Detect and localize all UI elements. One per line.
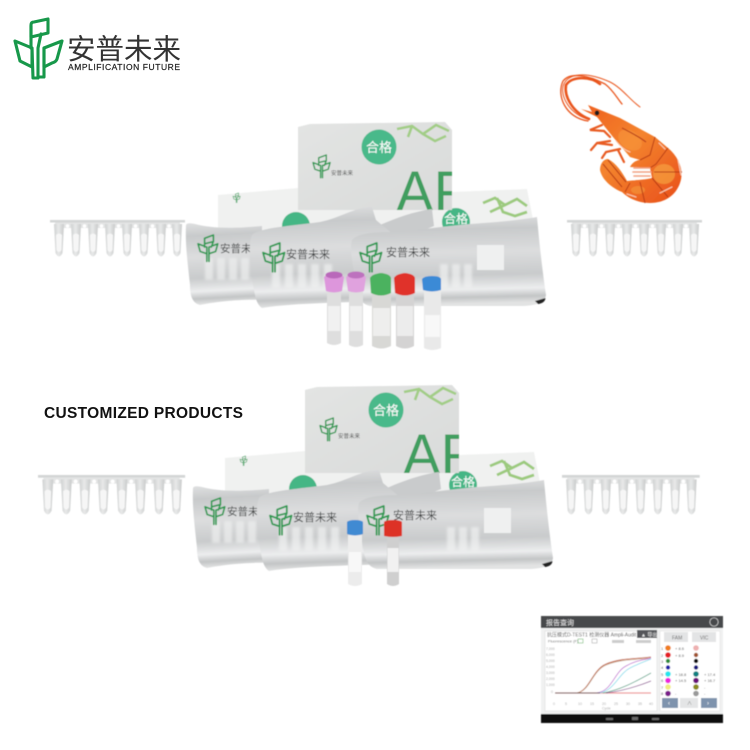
legend panel: -: [675, 691, 677, 696]
legend panel: -: [704, 691, 706, 696]
chart panel: 4,000: [546, 665, 555, 669]
chart panel: ▲ 导出: [641, 632, 657, 638]
chart panel: 5: [565, 702, 567, 706]
vial: red: [394, 273, 415, 348]
tube strip: top right: [567, 220, 702, 256]
pouch brand: right: 安普未来: [393, 508, 437, 522]
legend panel: + 18.8: [675, 672, 687, 677]
legend panel: ›: [707, 701, 709, 707]
product kit: top: [186, 122, 546, 350]
chart panel: 5,000: [546, 659, 555, 663]
logo Chinese name: 安普未来: [67, 27, 181, 68]
product kit: bottom: [193, 385, 553, 586]
carton brand name: 安普未来: [338, 432, 361, 440]
chart panel: 15: [590, 702, 594, 706]
logo mark: [15, 19, 62, 78]
chart panel: 30: [626, 702, 630, 706]
legend panel: 6: [661, 678, 664, 683]
chart panel: 35: [638, 702, 642, 706]
logo: [15, 19, 181, 78]
icon: shrimp: [561, 75, 682, 203]
screen header: [541, 616, 723, 628]
chart panel: Fluorescence (F): [548, 638, 579, 644]
legend panel: ‹: [668, 701, 670, 707]
pouch brand: middle: 安普未来: [286, 247, 330, 261]
chart panel: Cycle: [602, 706, 611, 710]
vial: purple one: [324, 272, 344, 345]
vial: blue: [422, 276, 441, 350]
legend panel: 3: [661, 659, 664, 664]
pouch brand: middle: 安普未来: [293, 510, 337, 524]
vial: red: [384, 520, 402, 586]
results screen: [541, 616, 723, 723]
logo English name: AMPLIFICATION FUTURE: [68, 62, 180, 72]
legend panel: + 8.9: [675, 653, 685, 658]
badge on back sachet: 合格: [451, 474, 475, 489]
chart panel: 25: [614, 702, 618, 706]
vial: blue: [347, 520, 363, 586]
chart panel: 20: [602, 702, 606, 706]
screen header: 报告查询: [546, 618, 574, 627]
badge on back sachet: 合格: [444, 211, 468, 226]
legend panel: 4: [661, 665, 664, 670]
tube strip: top left: [50, 220, 185, 256]
carton brand letters: AF: [396, 160, 468, 225]
screen bottom bar: [541, 714, 723, 723]
legend panel: -: [704, 685, 706, 690]
legend panel: ∧: [687, 701, 692, 707]
heading: CUSTOMIZED PRODUCTS: [44, 405, 243, 422]
chart panel: 0: [551, 690, 553, 694]
chart panel: 1,000: [546, 683, 555, 687]
pouch brand: left: 安普未来: [227, 505, 269, 518]
legend panel: 7: [661, 685, 664, 690]
chart panel: 10: [578, 702, 582, 706]
chart panel: 抗压模式D-TEST1 检测仪器 Ampli-Audit: [547, 632, 637, 638]
chart panel: 3,000: [546, 671, 555, 675]
legend panel: 8: [661, 691, 664, 696]
legend panel: + 8.6: [675, 646, 685, 651]
legend panel: [660, 631, 720, 711]
legend panel: 1: [661, 646, 664, 651]
carton brand letters: AF: [403, 423, 475, 488]
chart panel: 6,000: [546, 653, 555, 657]
vial: purple two: [346, 272, 366, 347]
legend panel: 2: [661, 653, 664, 658]
legend panel: FAM: [672, 636, 682, 642]
chart panel: 7,000: [546, 647, 555, 651]
carton brand name: 安普未来: [331, 169, 354, 177]
pouch brand: right: 安普未来: [386, 245, 430, 259]
chart panel: 0: [553, 702, 555, 706]
legend panel: VIC: [700, 636, 709, 642]
vial: green: [370, 273, 391, 348]
chart panel: [545, 630, 657, 711]
legend panel: + 17.4: [704, 672, 716, 677]
badge on carton: 合格: [373, 403, 399, 418]
legend panel: + 14.5: [675, 678, 687, 683]
pouch brand: left: 安普未来: [220, 242, 262, 255]
badge on carton: 合格: [366, 140, 392, 155]
tube strip: bottom left: [38, 475, 185, 514]
chart panel: 2,000: [546, 677, 555, 681]
tube strip: bottom right: [562, 475, 700, 514]
legend panel: + 16.7: [704, 678, 716, 683]
chart panel: 40: [649, 702, 653, 706]
legend panel: 5: [661, 672, 664, 677]
